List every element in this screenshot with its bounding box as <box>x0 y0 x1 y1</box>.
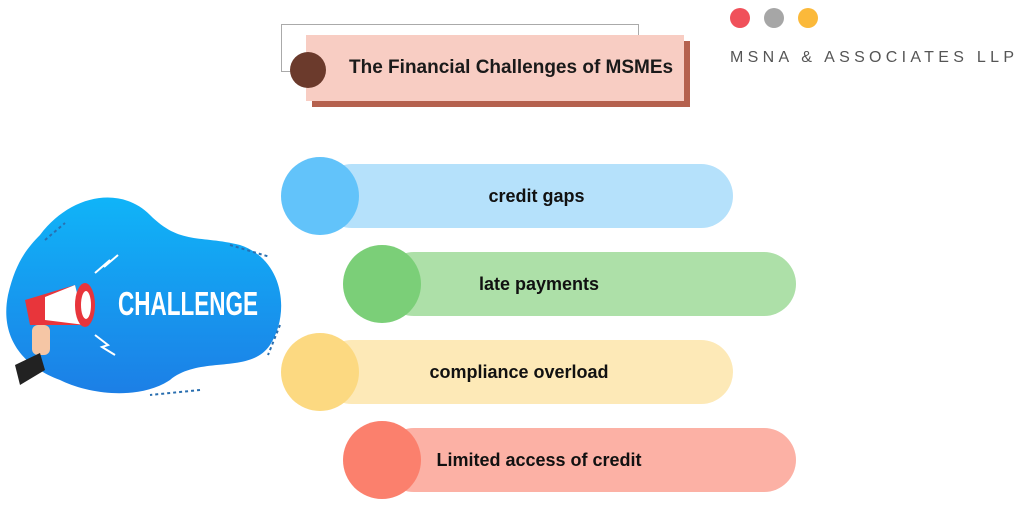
item: credit gaps: credit gaps <box>488 186 585 206</box>
item: limited access: Limited access of credit <box>436 450 642 470</box>
item: compliance overload: compliance overload <box>429 362 609 382</box>
logo text: MSNA & ASSOCIATES LLP <box>730 49 1018 66</box>
title <box>281 24 690 107</box>
logo dots <box>730 8 818 28</box>
item: compliance overload <box>281 333 733 411</box>
item: late payments <box>343 245 796 323</box>
title: The Financial Challenges of MSMEs <box>349 57 673 78</box>
item: late payments: late payments <box>479 274 599 294</box>
item: credit gaps <box>281 157 733 235</box>
item: limited access <box>343 421 796 499</box>
challenge graphic <box>6 198 282 396</box>
